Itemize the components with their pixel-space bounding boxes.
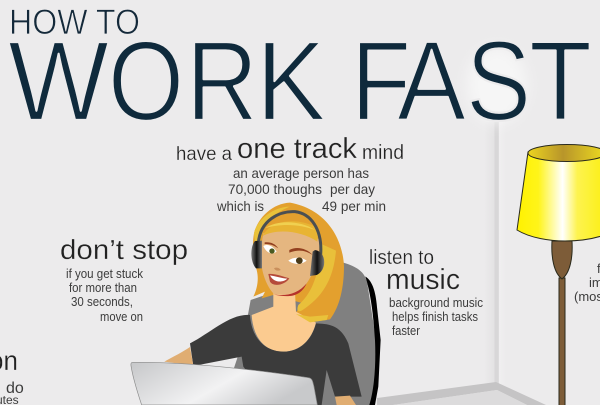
text: listen to music body: helps finish tasks xyxy=(392,309,478,324)
neck and chest xyxy=(252,292,316,352)
headset xyxy=(251,212,324,276)
heading: one track mind: mind xyxy=(362,142,404,164)
heading: one track mind: one track xyxy=(237,133,357,165)
face xyxy=(261,231,320,295)
chair xyxy=(233,263,381,405)
text: don't stop body: move on xyxy=(100,309,143,324)
title: work fast: K xyxy=(256,18,326,144)
text: listen to music body xyxy=(389,295,483,338)
wall corner xyxy=(467,47,527,384)
jaw shadow xyxy=(273,283,307,296)
text: listen to music body: faster xyxy=(392,323,421,338)
hair front xyxy=(254,207,336,322)
cropped left text block xyxy=(0,345,24,405)
title: work fast: A xyxy=(397,18,467,144)
text: one track mind body: 70,000 thoughs xyxy=(228,181,322,197)
text: don't stop body: for more than xyxy=(69,280,137,295)
title: work fast: F xyxy=(351,18,411,144)
hair back xyxy=(253,203,344,322)
title: work fast: T xyxy=(529,18,592,144)
text: listen to music body: background music xyxy=(389,295,483,310)
text: don't stop body: 30 seconds, xyxy=(71,294,133,309)
heading: one track mind xyxy=(176,133,404,165)
heading: listen to music xyxy=(369,247,460,296)
text: don't stop body: if you get stuck xyxy=(66,266,143,281)
cropped right text block xyxy=(574,261,600,304)
floor edge xyxy=(377,382,546,405)
heading: don't stop: don’t stop xyxy=(60,234,188,265)
text: one track mind body: per day xyxy=(330,181,375,197)
text: one track mind body xyxy=(216,165,386,214)
illustration: woman at laptop xyxy=(131,203,381,405)
text: one track mind body: 49 per min xyxy=(322,198,386,214)
top xyxy=(190,315,362,405)
nose xyxy=(274,268,281,271)
title: how to: HOW TO xyxy=(9,3,140,42)
title: work fast: W xyxy=(8,18,109,144)
text: one track mind body: an average person has xyxy=(233,165,369,181)
icon: floor lamp xyxy=(517,144,600,405)
text: one track mind body: which is xyxy=(216,198,264,214)
text: don't stop body xyxy=(66,266,143,324)
laptop xyxy=(131,362,317,405)
mouth xyxy=(268,274,289,285)
heading: one track mind: have a xyxy=(176,143,232,165)
cropped left text block: do xyxy=(6,380,24,397)
heading: listen to music: listen to xyxy=(369,247,434,269)
heading: listen to music: music xyxy=(386,264,460,296)
title: work fast: S xyxy=(466,18,531,144)
title: work fast: O xyxy=(108,18,184,144)
title: work fast xyxy=(8,18,592,144)
eyes and brows xyxy=(263,242,313,264)
title: work fast: R xyxy=(186,18,258,144)
arms xyxy=(164,347,356,405)
